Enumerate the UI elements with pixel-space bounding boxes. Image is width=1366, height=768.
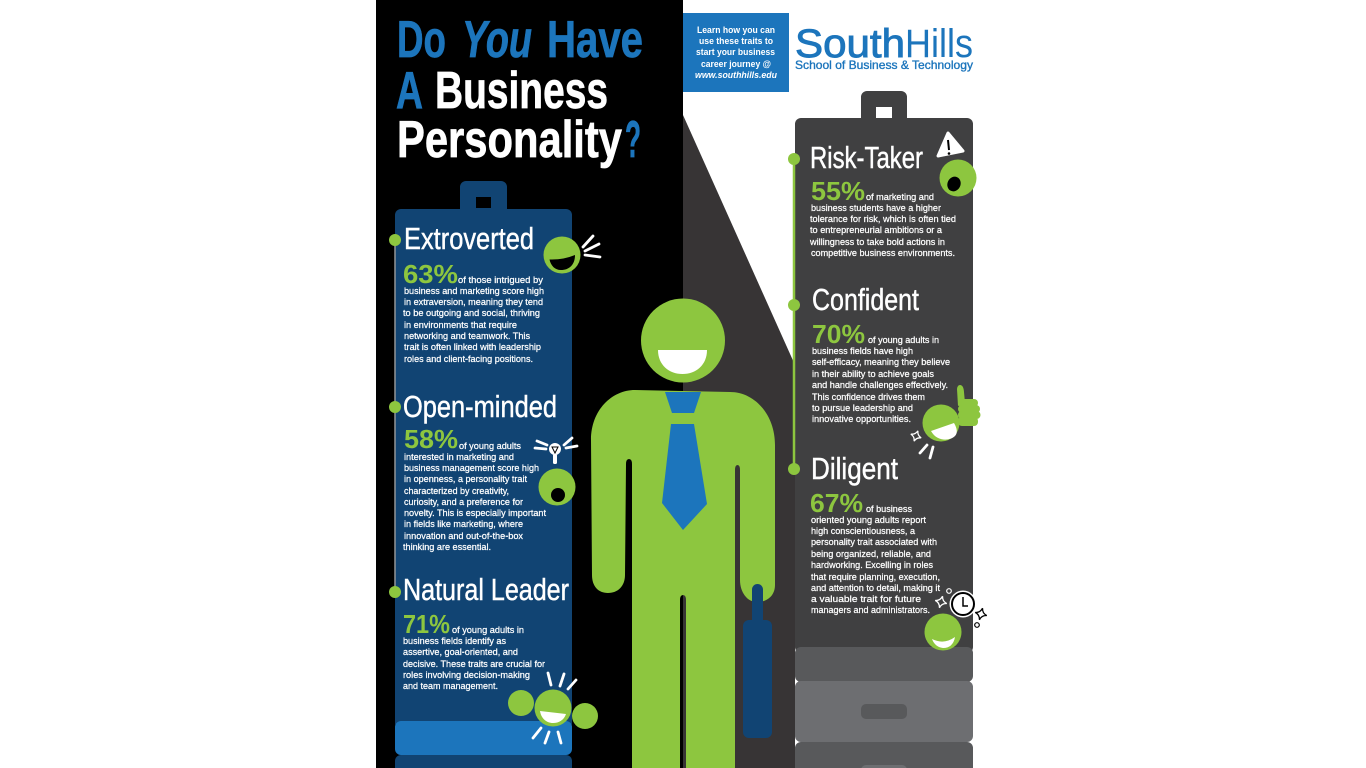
panel: left suitcase (395, 181, 572, 768)
section: Diligent: managers and administrators. (811, 604, 930, 615)
section: Diligent: hardworking. Excelling in roles (811, 559, 933, 570)
section: Diligent: of business (866, 503, 912, 514)
section: Diligent (810, 451, 940, 615)
title: ? (625, 111, 641, 169)
icon: surprised face with lightbulb (535, 438, 577, 506)
icon: cheering face (508, 673, 598, 743)
section: Risk-Taker: Risk-Taker (810, 140, 923, 175)
section: Confident: business fields have high (812, 345, 913, 356)
callout: website: Learn how you can (697, 25, 775, 35)
section: Confident: 70% (812, 319, 865, 349)
section: Diligent: a valuable trait for future (811, 593, 921, 604)
logo: South Hills: Hills (905, 22, 973, 66)
section: Risk-Taker: 55% (811, 176, 865, 206)
section: Natural Leader: decisive. These traits are crucial for (403, 658, 545, 669)
section: Open-minded: 58% (404, 424, 458, 454)
section: Natural Leader (403, 572, 569, 691)
title: Personality (397, 111, 622, 169)
section: Risk-Taker: tolerance for risk, which is often tied (810, 213, 956, 224)
section: Extroverted: Extroverted (404, 221, 534, 256)
title: Have (547, 11, 643, 69)
section: Open-minded (403, 389, 557, 552)
section: Diligent: 67% (810, 488, 863, 518)
section: Extroverted: 63% (403, 259, 458, 289)
logo: South Hills (795, 22, 973, 72)
callout: website (683, 13, 789, 92)
section: Open-minded: in fields like marketing, where (404, 518, 523, 529)
callout: website: www.southhills.edu (695, 70, 777, 80)
section: Open-minded: of young adults (459, 440, 521, 451)
section: Extroverted: of those intrigued by (458, 274, 543, 285)
logo: South Hills: School of Business & Technology (795, 58, 973, 72)
figure: businessman (591, 298, 775, 768)
section: Open-minded: in openness, a personality trait (404, 473, 527, 484)
section: Diligent: being organized, reliable, and (811, 548, 931, 559)
section: Risk-Taker: of marketing and (866, 191, 934, 202)
title: Business (435, 62, 608, 120)
section: Extroverted (403, 221, 544, 364)
section: Diligent: and attention to detail, making it (811, 582, 940, 593)
section: Extroverted: networking and teamwork. This (404, 330, 530, 341)
title: A (396, 62, 423, 120)
section: Natural Leader: and team management. (403, 680, 498, 691)
section: Confident: innovative opportunities. (812, 413, 911, 424)
callout: website: use these traits to (699, 36, 773, 46)
section: Risk-Taker: competitive business environments. (811, 247, 955, 258)
section: Confident: and handle challenges effectively. (812, 379, 948, 390)
section: Diligent: oriented young adults report (811, 514, 926, 525)
section: Extroverted: business and marketing score high (404, 285, 544, 296)
section: Risk-Taker: business students have a higher (811, 202, 941, 213)
section: Risk-Taker (809, 140, 956, 258)
section: Extroverted: in environments that require (404, 319, 517, 330)
timeline: right (788, 153, 800, 475)
section: Confident (812, 282, 950, 424)
section: Open-minded: thinking are essential. (403, 541, 491, 552)
section: Extroverted: in extraversion, meaning they tend (404, 296, 543, 307)
section: Confident: in their ability to achieve goals (812, 368, 934, 379)
section: Extroverted: trait is often linked with leadership (404, 341, 541, 352)
icon: smiling face with clock (924, 589, 988, 650)
section: Natural Leader: Natural Leader (403, 572, 569, 607)
section: Open-minded: business management score high (404, 462, 539, 473)
section: Open-minded: innovation and out-of-the-box (404, 530, 523, 541)
section: Natural Leader: of young adults in (452, 624, 524, 635)
section: Open-minded: novelty. This is especially important (404, 507, 546, 518)
callout: website: start your business (696, 47, 775, 57)
section: Natural Leader: 71% (403, 609, 450, 639)
section: Open-minded: Open-minded (403, 389, 557, 424)
logo: South Hills: South (795, 22, 905, 66)
section: Diligent: that require planning, execution, (811, 571, 940, 582)
section: Natural Leader: roles involving decision-making (403, 669, 530, 680)
section: Confident: of young adults in (868, 334, 939, 345)
section: Risk-Taker: to entrepreneurial ambitions or a (810, 224, 943, 235)
section: Extroverted: roles and client-facing positions. (404, 353, 533, 364)
timeline: left (389, 234, 401, 598)
section: Confident: This confidence drives them (812, 391, 925, 402)
section: Diligent: high conscientiousness, a (811, 525, 916, 536)
section: Diligent: personality trait associated with (811, 536, 937, 547)
black background panel (376, 0, 683, 768)
icon: laughing face (544, 236, 600, 274)
section: Risk-Taker: willingness to take bold actions in (809, 236, 945, 247)
title: Do (397, 11, 446, 69)
section: Open-minded: interested in marketing and (404, 451, 514, 462)
icon: confident face with thumbs up (909, 385, 980, 458)
figure shadow (683, 115, 795, 768)
section: Confident: to pursue leadership and (812, 402, 913, 413)
section: Confident: self-efficacy, meaning they believe (812, 356, 950, 367)
section: Extroverted: to be outgoing and social, thriving (403, 307, 540, 318)
section: Natural Leader: assertive, goal-oriented, and (403, 646, 518, 657)
section: Confident: Confident (812, 282, 919, 317)
section: Open-minded: curiosity, and a preference for (404, 496, 523, 507)
title (396, 11, 643, 169)
section: Natural Leader: business fields identify as (403, 635, 506, 646)
title: You (462, 11, 532, 69)
section: Open-minded: characterized by creativity, (404, 485, 509, 496)
section: Diligent: Diligent (811, 451, 898, 486)
icon: worried face with warning sign (938, 133, 976, 196)
callout: website: career journey @ (701, 59, 771, 69)
panel: right suitcase (795, 91, 973, 768)
